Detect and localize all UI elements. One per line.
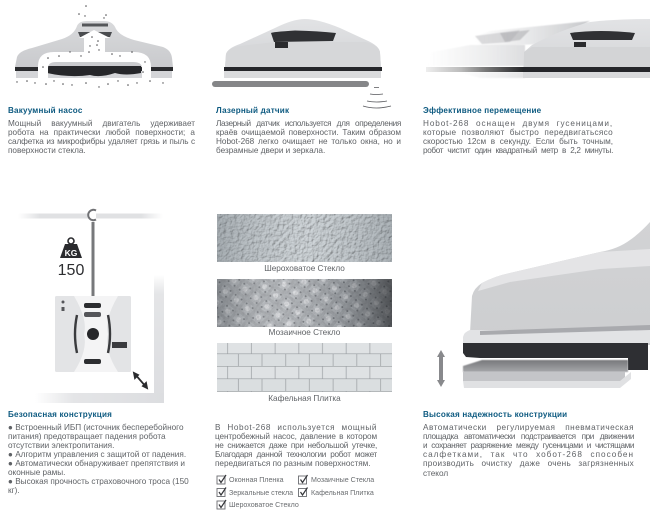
lower pad [463,360,631,388]
arrow: up and down [437,350,445,387]
text: laser sensor: Hobot-268 легко очищает не только окна, но и [216,137,401,146]
text: vacuum pump: поверхности стекла. [8,146,86,155]
text: high reliability: площадка автоматически подстраивается при движении [423,432,634,441]
caption: tile: Кафельная Плитка [268,394,341,403]
text: centrifugal pump: В Hobot-268 используется мощный [215,423,377,432]
illustration: vacuum pump robot [15,5,173,88]
text: vacuum pump: Мощный вакуумный двигатель удерживает [8,119,195,128]
robot body [225,19,381,67]
checklist: surfaces: Зеркальные стекла [229,488,293,496]
checklist: surfaces: Мозаичные Стекла [311,476,374,484]
robot top view [55,296,131,372]
dark seal [463,343,648,370]
caption: mosaic glass: Мозаичное Стекло [269,328,340,337]
checklist: surfaces: Кафельная Плитка [311,488,374,496]
heading: laser sensor: Лазерный датчик [216,106,289,115]
heading: vacuum pump: Вакуумный насос [8,106,83,115]
rough glass swatch [217,214,392,262]
text: centrifugal pump: центробежный насос, давление в котором [215,432,377,441]
text: vacuum pump [8,119,195,155]
illustration: reliable construction close-up [437,222,650,388]
motion ghost [427,21,590,78]
text: centrifugal pump: передвигаться по разным поверхностям. [215,459,371,468]
text: efficient movement: Hobot-268 оснащен двумя гусеницами, [423,119,613,128]
text: laser sensor: безрамные двери и зеркала. [216,146,325,155]
tile swatch [217,343,392,392]
text: high reliability: производить очистку даже очень загрязненных [423,459,634,468]
icon: 150 kg weight: 150 [58,262,84,279]
laser waves [363,88,391,108]
text: laser sensor [216,119,401,155]
text: safe construction: питания) предотвращает падения робота [8,432,166,441]
text: efficient movement: скоростью 12см в секунду. Если быть точным, [423,137,613,146]
text: safe construction: ● Автоматически обнаруживает препятствия и [8,459,185,468]
text: high reliability [423,422,634,478]
safety rope [92,222,94,297]
text: efficient movement: которые позволяют быстро передвигатьсясо [423,128,613,137]
checklist: surfaces: Шероховатое Стекло [229,501,299,509]
heading: high reliability: Высокая надежность конструкции [423,410,567,419]
heading: efficient movement: Эффективное перемещение [423,106,541,115]
text: high reliability: стекол [423,468,448,478]
text: laser sensor: Лазерный датчик используется для определения [216,119,401,128]
illustration: efficient movement robot [426,19,650,78]
text: centrifugal pump: не снижается даже при небольшой утечке, [215,441,377,450]
text: high reliability: Автоматически регулируемая пневматическая [423,422,634,432]
text: safe construction: оконные рамы. [8,468,65,477]
text: high reliability: и сохраняет разряжение между гусеницами и чистящами [423,441,634,450]
text: efficient movement: робот чистит один квадратный метр в 2,2 минуты. [423,146,613,155]
checklist: surfaces: Оконная Пленка [229,476,284,484]
illustration: safe construction robot on rope [18,210,164,403]
hook [88,210,96,220]
text: vacuum pump: робота на практически любой поверхности; а [8,128,195,137]
text: centrifugal pump: Благодаря данной технологии робот может [215,450,377,459]
surface samples [217,214,392,392]
text: high reliability: салфетками, так что хобот-268 способен [423,450,634,459]
window frame [18,214,164,403]
text: safe construction [8,423,189,495]
icon: 150 kg weight [58,238,84,279]
checklist: surfaces [216,474,374,510]
text: safe construction: ● Алгоритм управления с защитой от падения. [8,450,186,459]
mosaic glass swatch [217,279,392,327]
text: safe construction: ● Встроенный ИБП (источник бесперебойного [8,423,184,432]
illustration: laser sensor robot [212,19,391,108]
text: safe construction: кг). [8,486,20,495]
dust particles [16,5,164,88]
text: safe construction: ● Высокая прочность страховочного троса (150 [8,477,189,486]
text: centrifugal pump [215,423,377,468]
robot body [15,21,173,67]
text: efficient movement [423,119,613,155]
heading: safe construction: Безопасная конструкция [8,410,112,419]
text: safe construction: отсутствии электропитания. [8,441,114,450]
robot housing [470,222,650,345]
robot body [523,19,650,78]
text: vacuum pump: салфетка из микрофибры удаляет грязь и пыль с [8,137,195,146]
icon: 150 kg weight: KG [65,248,78,258]
text: laser sensor: краёв очищаемой поверхности. Таким образом [216,128,401,137]
glass edge bar [212,81,369,87]
caption: rough glass: Шероховатое Стекло [264,264,345,273]
arrow: edge gap [134,373,147,388]
airflow arrow [38,30,151,78]
